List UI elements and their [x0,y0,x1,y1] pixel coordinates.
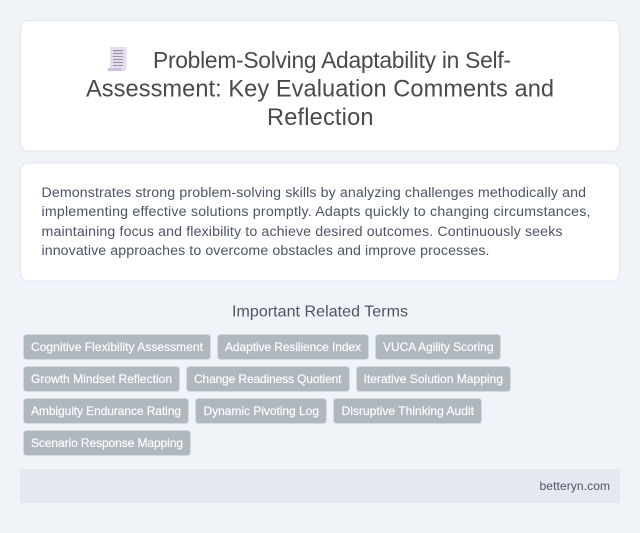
tag: Ambiguity Endurance Rating [31,404,181,418]
title: Reflection [267,105,374,131]
heading: important related terms: Important Related Terms [232,304,408,320]
tag: Iterative Solution Mapping [364,372,503,386]
tag [196,398,326,424]
tag: Scenario Response Mapping [31,436,183,450]
panel: title card [20,20,620,151]
tag: Change Readiness Quotient [194,372,342,386]
tag: Dynamic Pivoting Log [204,404,319,418]
title: Problem-Solving Adaptability in Self- [153,47,511,73]
tag [24,334,210,360]
footer source text: betteryn.com [540,479,610,493]
description text: implementing effective solutions promptly. Adapts quickly to changing circumstances, [42,204,590,220]
title: Assessment: Key Evaluation Comments and [86,76,554,102]
tag list [24,334,510,456]
description text: maintaining focus and flexibility to achieve desired outcomes. Continuously seeks [42,224,562,240]
tag: Adaptive Resilience Index [225,340,361,354]
description text [42,185,590,259]
tag: Growth Mindset Reflection [31,372,172,386]
title [86,47,554,131]
panel: description card [20,163,620,281]
tag [356,366,510,392]
tag [24,398,188,424]
tag [218,334,368,360]
tag [334,398,482,424]
tag [24,430,190,456]
footer [20,469,620,503]
description text: innovative approaches to overcome obstacles and improve processes. [42,243,490,259]
tag [376,334,500,360]
tag: VUCA Agility Scoring [383,340,494,354]
tag: Cognitive Flexibility Assessment [31,340,204,354]
description text: Demonstrates strong problem-solving skills by analyzing challenges methodically and [42,185,586,201]
tag [24,366,180,392]
icon: paper scroll [108,47,126,71]
tag [186,366,350,392]
tag: Disruptive Thinking Audit [342,404,475,418]
